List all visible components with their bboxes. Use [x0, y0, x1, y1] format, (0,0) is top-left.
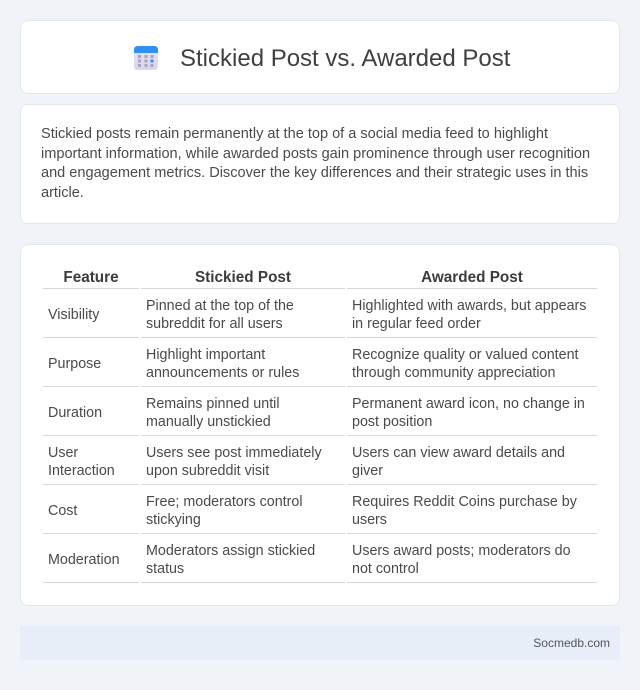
row: Visibility feature: Visibility: [48, 307, 99, 323]
row: Duration stickied: [146, 396, 280, 430]
row: User Interaction feature: Interaction: [48, 463, 115, 479]
table header: Awarded Post: Awarded Post: [421, 269, 523, 286]
table header: Feature: Feature: [63, 269, 119, 286]
row: Cost awarded: users: [352, 512, 387, 528]
row: Moderation stickied: status: [146, 561, 184, 577]
panel: title card: [20, 20, 620, 94]
title: Stickied Post vs. Awarded Post: [180, 45, 510, 72]
row: Visibility stickied: Pinned at the top of the: [146, 298, 294, 314]
text block: introduction: [41, 126, 590, 200]
footer bar: [20, 626, 620, 660]
row: Purpose awarded: through community appreciation: [352, 365, 555, 381]
row: User Interaction stickied: upon subreddit visit: [146, 463, 269, 479]
row: Moderation stickied: [146, 543, 315, 577]
row: Visibility stickied: subreddit for all users: [146, 316, 283, 332]
text block: introduction: article.: [41, 184, 84, 200]
row: Duration awarded: [352, 396, 585, 430]
row: Cost stickied: [146, 494, 303, 528]
row: Duration awarded: post position: [352, 414, 432, 430]
icon: calendar: [134, 46, 158, 70]
row: Moderation stickied: Moderators assign stickied: [146, 543, 315, 559]
row: User Interaction awarded: giver: [352, 463, 383, 479]
text block: introduction: and engagement metrics. Discover the key differences and their strategic uses in this: [41, 165, 588, 181]
row: Purpose awarded: Recognize quality or valued content: [352, 347, 579, 363]
row: Visibility stickied: [146, 298, 294, 332]
row: Purpose stickied: [146, 347, 299, 381]
row: Purpose feature: Purpose: [48, 356, 101, 372]
row: Cost stickied: Free; moderators control: [146, 494, 303, 510]
row: Duration stickied: manually unstickied: [146, 414, 271, 430]
panel: introduction card: [20, 104, 620, 224]
row: Cost feature: Cost: [48, 503, 77, 519]
row: Duration feature: Duration: [48, 405, 102, 421]
row: Visibility awarded: [352, 298, 586, 332]
row: User Interaction feature: [48, 445, 115, 479]
row: Moderation awarded: [352, 543, 571, 577]
table header: Stickied Post: Stickied Post: [195, 269, 291, 286]
row: Moderation feature: Moderation: [48, 552, 120, 568]
row: Visibility awarded: Highlighted with awards, but appears: [352, 298, 586, 314]
row: User Interaction feature: User: [48, 445, 78, 461]
text block: introduction: important information, while awarded posts gain prominence through user recognition: [41, 146, 590, 162]
row: Purpose stickied: Highlight important: [146, 347, 265, 363]
panel: comparison table card: [20, 244, 620, 606]
row: Moderation awarded: not control: [352, 561, 419, 577]
row: Cost awarded: Requires Reddit Coins purchase by: [352, 494, 577, 510]
row: Cost awarded: [352, 494, 577, 528]
row: Purpose stickied: announcements or rules: [146, 365, 299, 381]
text block: introduction: Stickied posts remain permanently at the top of a social media feed to highlight: [41, 126, 548, 142]
row: Moderation awarded: Users award posts; moderators do: [352, 543, 571, 559]
row: User Interaction stickied: [146, 445, 322, 479]
row: User Interaction awarded: Users can view award details and: [352, 445, 565, 461]
row: User Interaction awarded: [352, 445, 565, 479]
row: Duration stickied: Remains pinned until: [146, 396, 280, 412]
row: Cost stickied: stickying: [146, 512, 201, 528]
footer text: Socmedb.com: [533, 636, 610, 650]
row: Visibility awarded: in regular feed order: [352, 316, 481, 332]
row: Duration awarded: Permanent award icon, no change in: [352, 396, 585, 412]
row: User Interaction stickied: Users see post immediately: [146, 445, 322, 461]
row: Purpose awarded: [352, 347, 579, 381]
